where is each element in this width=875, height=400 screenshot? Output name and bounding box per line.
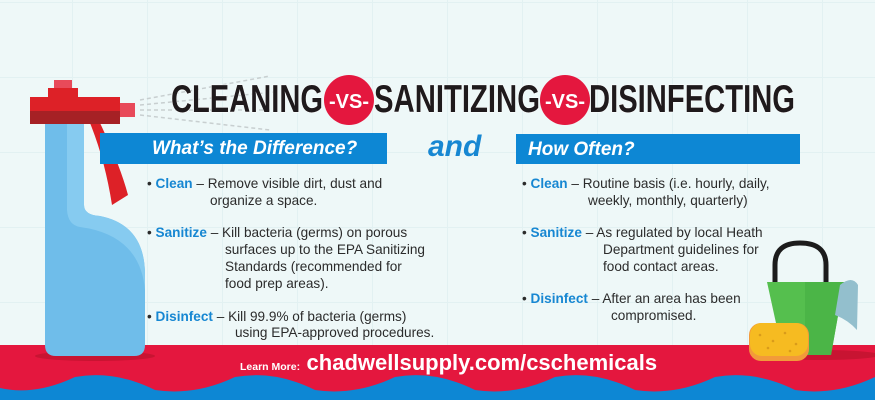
learn more link: Learn More: chadwellsupply.com/cschemicals	[240, 350, 657, 375]
text: surfaces up to the EPA Sanitizing	[225, 242, 425, 257]
text: • Sanitize – Kill bacteria (germs) on porous	[147, 225, 407, 240]
text: compromised.	[611, 308, 696, 323]
text: using EPA-approved procedures.	[235, 325, 434, 340]
title: SANITIZING	[374, 78, 540, 121]
heading bar: how often	[516, 134, 800, 164]
title: CLEANING	[171, 78, 323, 121]
text: Department guidelines for	[603, 242, 759, 257]
text: • Disinfect – Kill 99.9% of bacteria (germs)	[147, 309, 406, 324]
text: weekly, monthly, quarterly)	[588, 193, 748, 208]
text: • Clean – Remove visible dirt, dust and	[147, 176, 382, 191]
text: food prep areas).	[225, 276, 329, 291]
right frequency	[522, 176, 770, 323]
title	[171, 75, 795, 125]
and: and	[428, 130, 481, 163]
spray mist lines	[140, 76, 275, 130]
footer wave band	[0, 345, 875, 400]
bucket and sponge	[749, 240, 875, 361]
heading bar: difference	[100, 133, 387, 164]
text: Standards (recommended for	[225, 259, 402, 274]
left definitions	[147, 176, 434, 340]
heading bar: difference: What’s the Difference?	[152, 138, 357, 159]
title: DISINFECTING	[589, 78, 795, 121]
text: organize a space.	[210, 193, 317, 208]
text: food contact areas.	[603, 259, 719, 274]
text: • Disinfect – After an area has been	[522, 291, 741, 306]
heading bar: how often: How Often?	[528, 139, 635, 160]
title: -VS-	[329, 91, 369, 113]
text: • Clean – Routine basis (i.e. hourly, daily,	[522, 176, 770, 191]
title: -VS-	[545, 91, 585, 113]
text: • Sanitize – As regulated by local Heath	[522, 225, 763, 240]
